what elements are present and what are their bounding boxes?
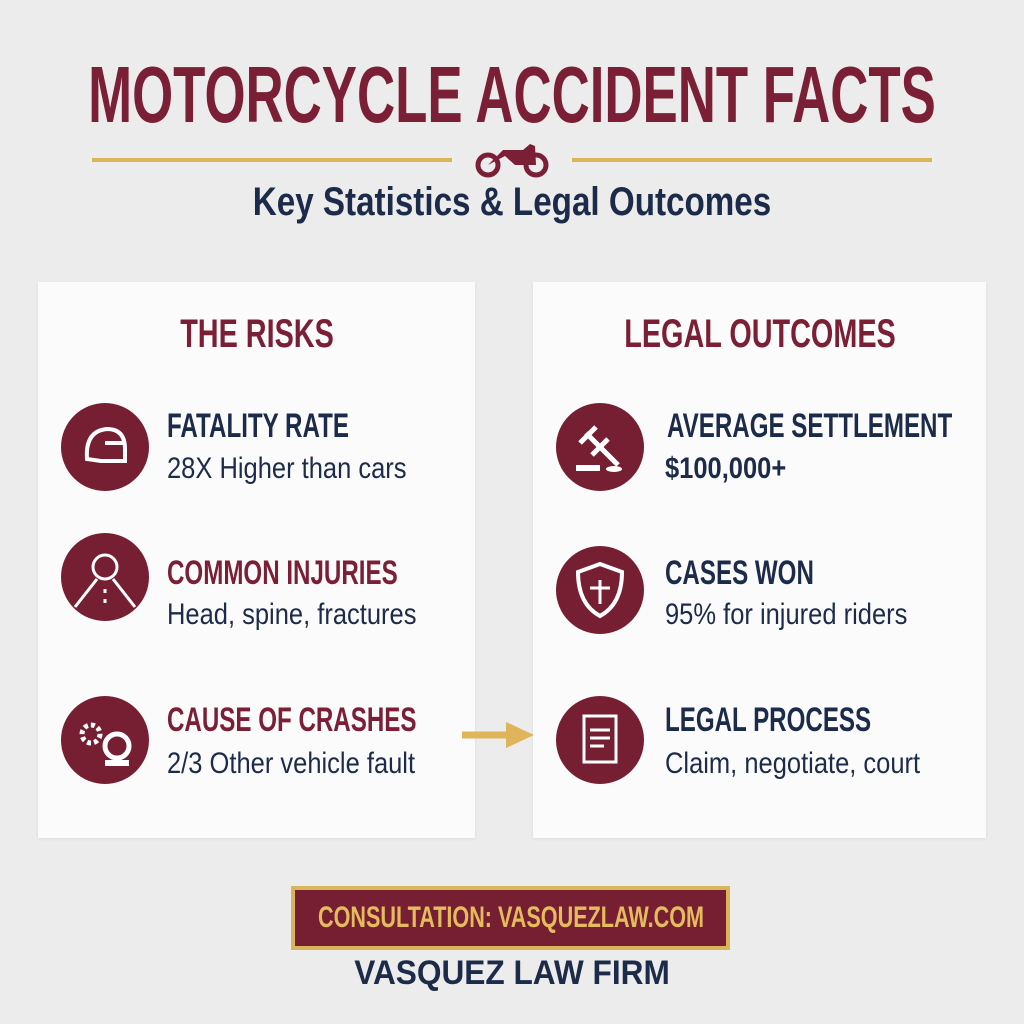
icon: helmet — [61, 403, 149, 491]
panel: legal outcomes: LEGAL PROCESS — [665, 701, 871, 739]
panel: the risks — [38, 282, 475, 838]
gold divider with motorcycle — [92, 144, 932, 178]
panel: the risks: THE RISKS — [180, 312, 333, 356]
icon: shield — [556, 546, 644, 634]
panel: legal outcomes: LEGAL OUTCOMES — [624, 312, 895, 356]
panel: the risks: 2/3 Other vehicle fault — [167, 747, 415, 780]
icon: document — [556, 696, 644, 784]
panel: legal outcomes: Claim, negotiate, court — [665, 747, 920, 780]
callout button — [291, 886, 730, 950]
callout button: CONSULTATION: VASQUEZLAW.COM — [318, 901, 703, 934]
icon: motorcycle — [476, 144, 548, 178]
icon: gears — [61, 696, 149, 784]
panel: legal outcomes: CASES WON — [665, 554, 814, 592]
panel: the risks: 28X Higher than cars — [167, 452, 407, 485]
panel: the risks: COMMON INJURIES — [167, 554, 398, 592]
arrow — [462, 722, 534, 748]
panel: legal outcomes — [533, 282, 986, 838]
panel: the risks: CAUSE OF CRASHES — [167, 701, 416, 739]
icon: gavel — [556, 403, 644, 491]
title: MOTORCYCLE ACCIDENT FACTS — [88, 50, 936, 139]
panel: legal outcomes: 95% for injured riders — [665, 598, 907, 631]
icon: injuries — [61, 533, 149, 621]
subtitle: Key Statistics & Legal Outcomes — [253, 180, 771, 224]
panel: the risks: FATALITY RATE — [167, 407, 349, 445]
panel: legal outcomes: $100,000+ — [665, 452, 786, 485]
footer firm name: VASQUEZ LAW FIRM — [354, 954, 670, 992]
panel: the risks: Head, spine, fractures — [167, 598, 416, 631]
panel: legal outcomes: AVERAGE SETTLEMENT — [667, 407, 952, 445]
